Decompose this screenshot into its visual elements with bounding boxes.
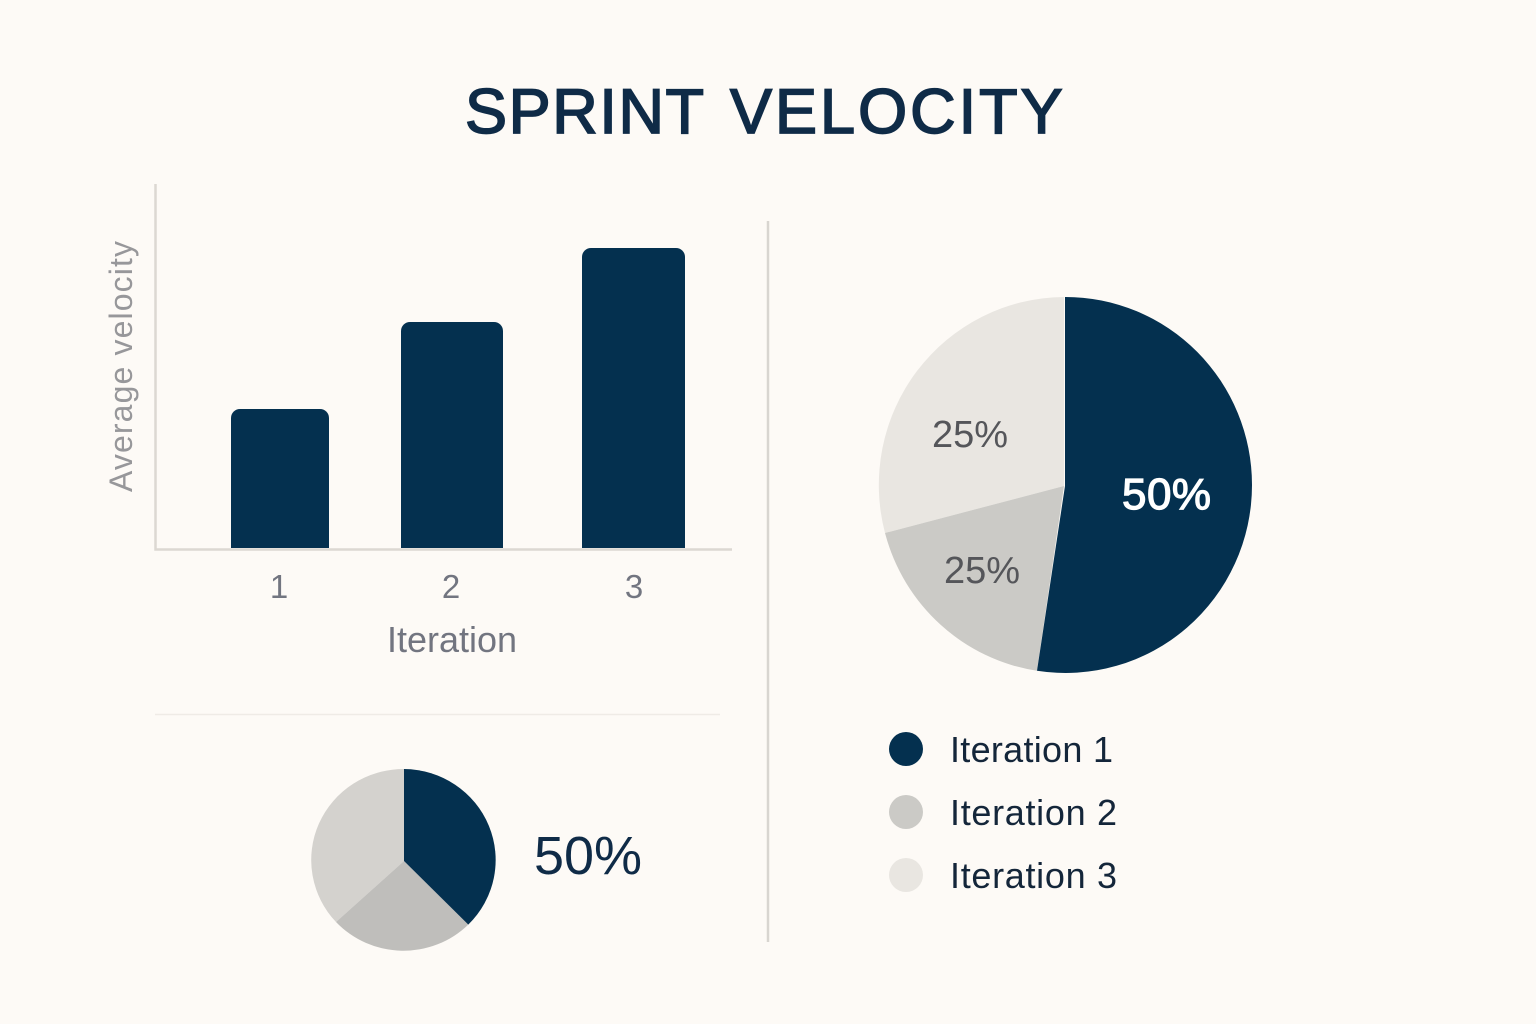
x tick label 3: 3: [625, 568, 643, 605]
slice: dark 50%: [1037, 297, 1252, 673]
title: VELOCITY: [730, 77, 1066, 147]
slice: dark: [404, 769, 496, 925]
bar: iteration 3: [582, 248, 685, 548]
slice: light: [311, 769, 404, 922]
legend item: iteration 1: Iteration 1: [950, 729, 1113, 770]
legend item: iteration 2: Iteration 2: [950, 792, 1117, 833]
bar: iteration 1: [231, 409, 329, 548]
x axis title: Iteration: [387, 619, 517, 660]
bar chart: average velocity by iteration: [103, 184, 732, 660]
x tick label 1: 1: [270, 568, 288, 605]
bar: iteration 2: [401, 322, 503, 548]
x tick label 2: 2: [442, 568, 460, 605]
slice: mid 25%: [885, 486, 1064, 671]
y axis title: Average velocity: [103, 241, 139, 492]
chart axes: [156, 184, 732, 550]
label: 50%: 50%: [1122, 470, 1211, 519]
small pie chart: [311, 769, 496, 951]
large pie chart: [879, 297, 1252, 673]
label: 25% lower: 25%: [944, 550, 1020, 592]
label: 25% upper: 25%: [932, 414, 1008, 456]
small pie value: 50%: [534, 826, 642, 886]
title: SPRINT: [465, 77, 706, 147]
legend item: iteration 3: Iteration 3: [950, 855, 1117, 896]
slice: mid grey: [336, 861, 468, 951]
slice: light 25%: [879, 297, 1064, 533]
legend: [889, 729, 1117, 896]
